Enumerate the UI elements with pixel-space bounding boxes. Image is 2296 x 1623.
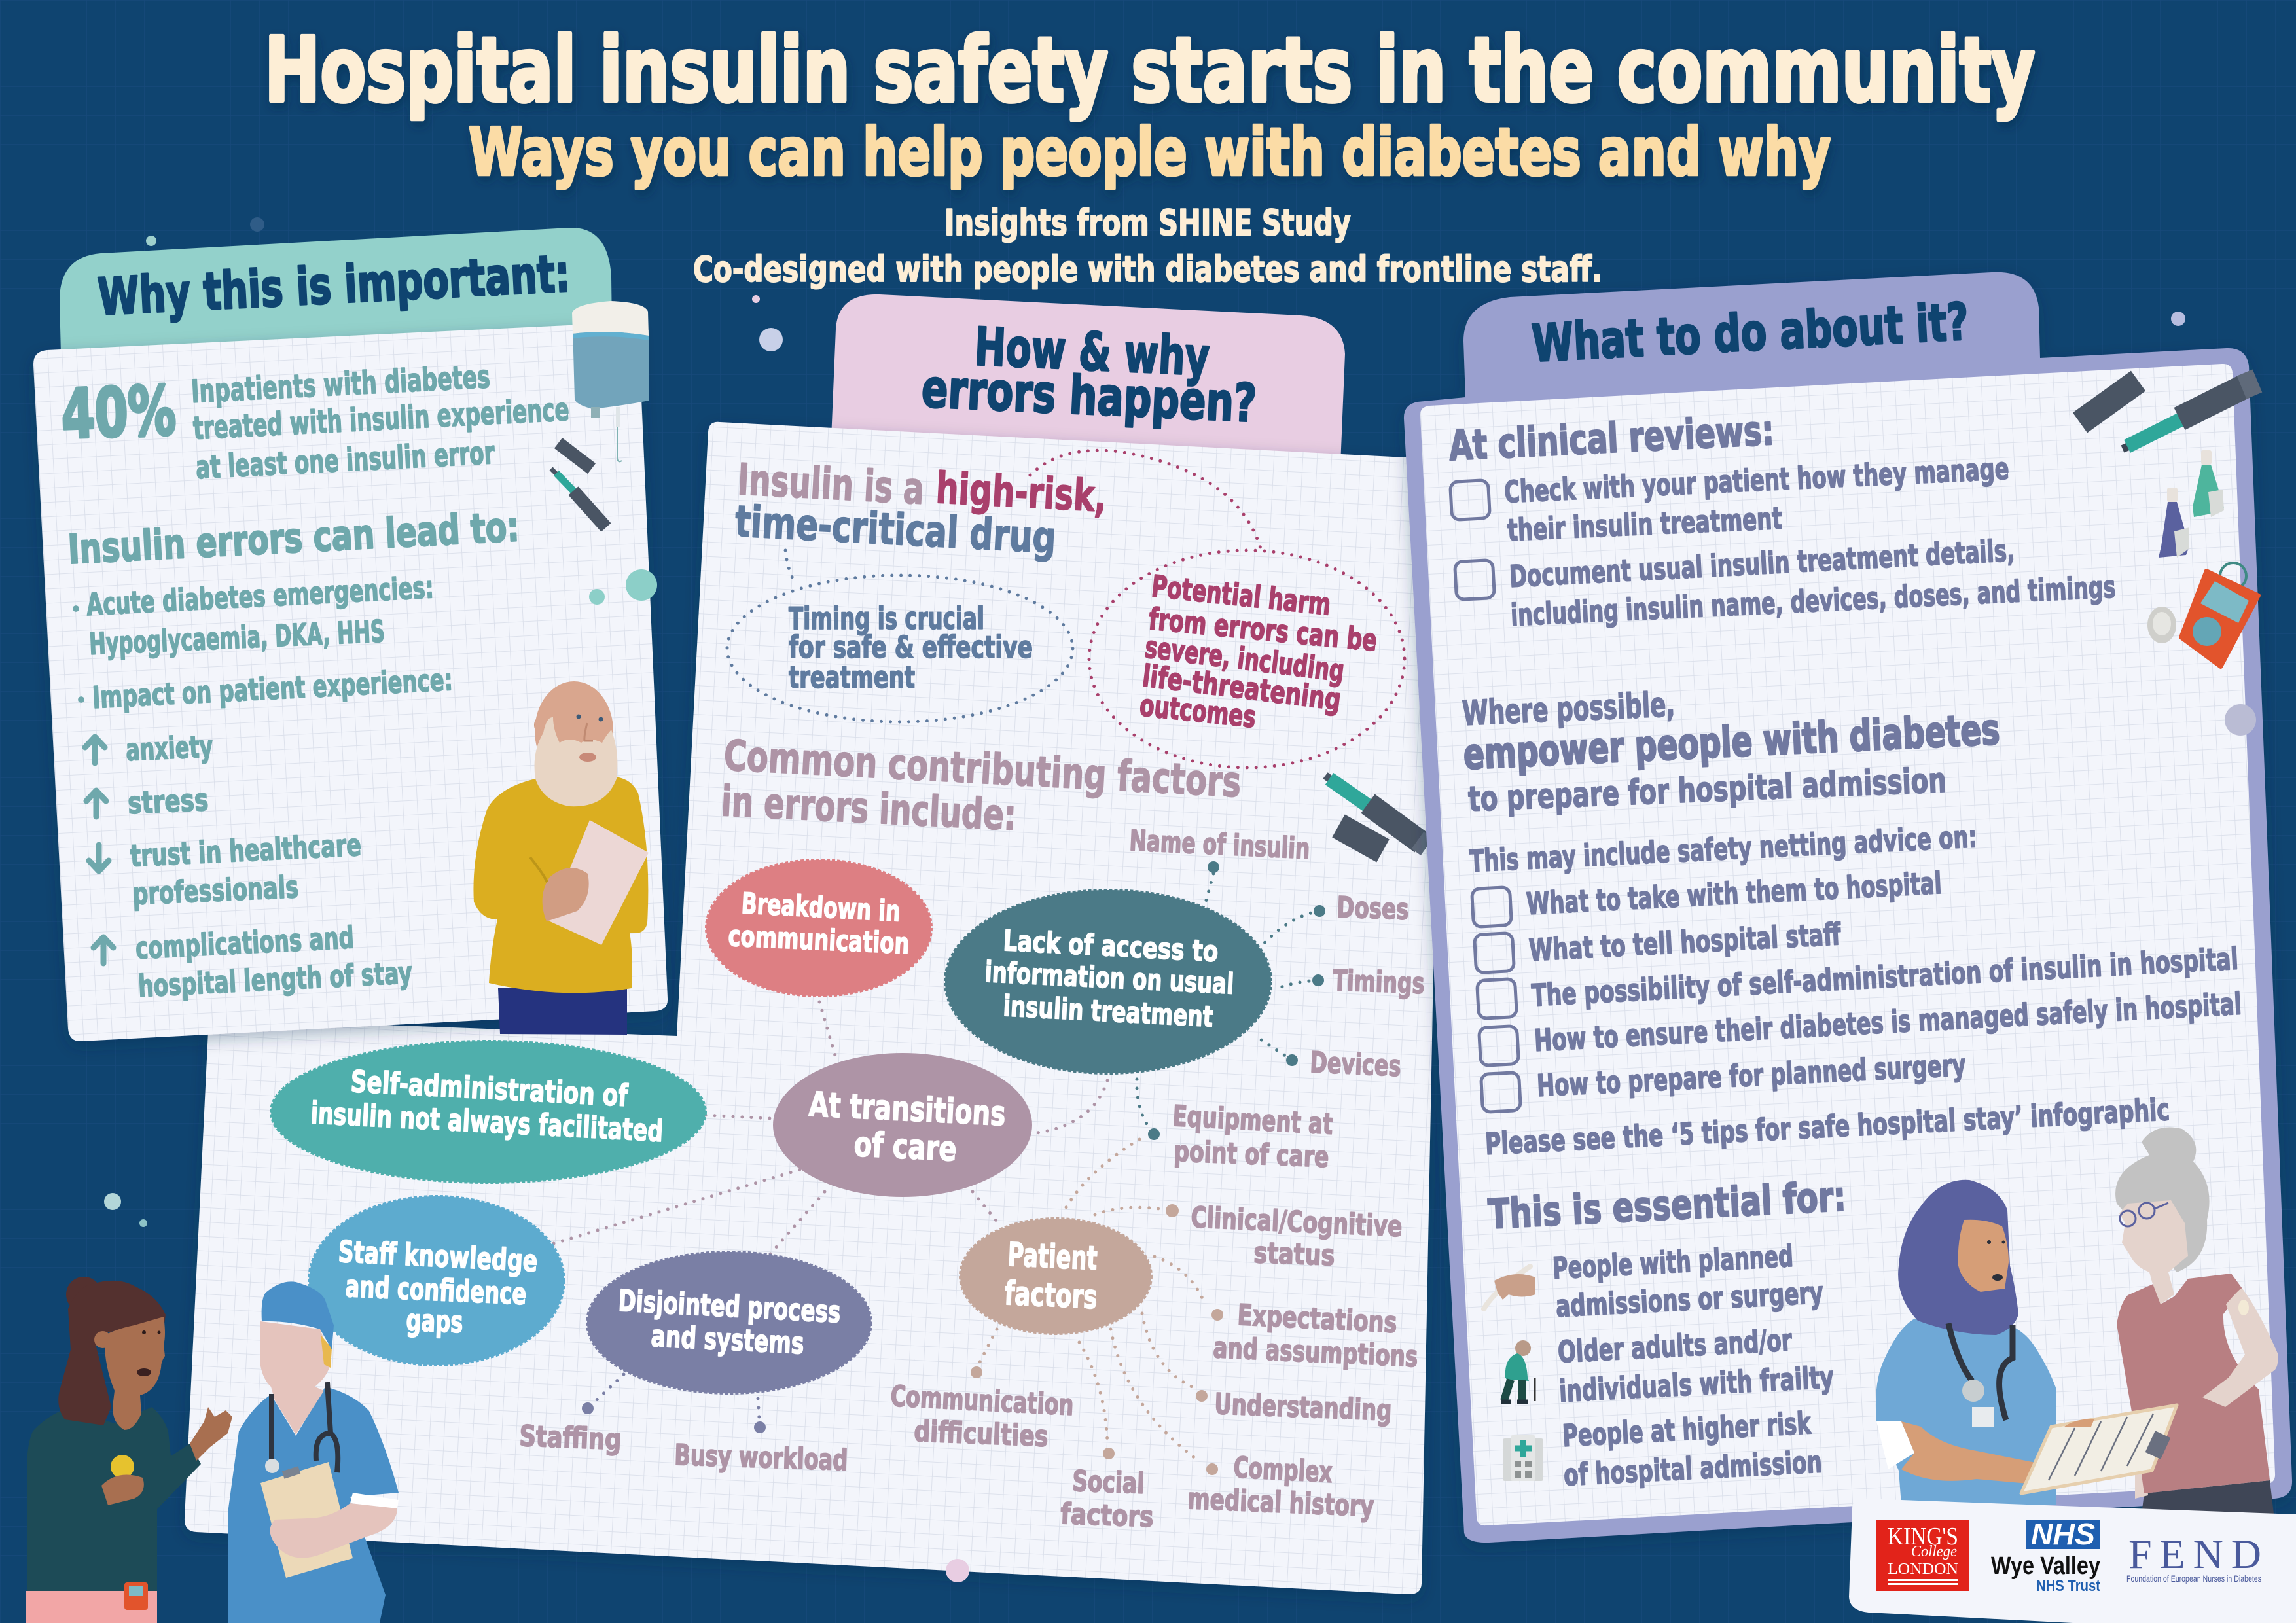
icon: insulin pump (2147, 563, 2259, 667)
checklist: safety netting advice: How to prepare for planned surgery (1536, 1047, 1967, 1103)
callout: timing is crucial: for safe & effective (789, 630, 1033, 665)
icon: insulin pen left (551, 443, 606, 527)
node dots (582, 861, 1325, 1475)
labels: contributing factor details: factors (1060, 1497, 1154, 1534)
panel: logos (1849, 1499, 2296, 1623)
node: lack of access: Lack of access to (1002, 924, 1219, 969)
logo: nhs wye valley: NHS (2031, 1517, 2095, 1551)
section: empower people: to prepare for hospital admission (1467, 761, 1947, 819)
section: empower people (1462, 685, 2001, 819)
labels: contributing factor details: Name of insulin (1128, 824, 1311, 866)
node: staff knowledge: and confidence (345, 1268, 528, 1311)
illustration: woman with diabetes (26, 1277, 232, 1623)
labels: contributing factor details: Clinical/Cognitive (1191, 1201, 1403, 1243)
list: consequences (73, 569, 454, 1004)
section: this is essential for: People at higher risk (1562, 1405, 1812, 1454)
node: lack of access (945, 890, 1271, 1073)
heading: what to do about it: What to do about it? (1530, 293, 1970, 374)
node: breakdown in communication: Breakdown in (740, 887, 901, 929)
heading: insulin high risk: high-risk, (935, 463, 1108, 522)
stat: 40 percent: 40% (60, 372, 177, 454)
subtitle: Ways you can help people with diabetes and why (469, 114, 1831, 190)
icon: hand with scalpel (1484, 1266, 1535, 1309)
callout: potential harm: outcomes (1138, 687, 1258, 735)
decorative dots (104, 217, 2185, 1227)
panel: what to do about it (1404, 272, 2292, 1543)
callout: potential harm: life-threatening (1141, 658, 1343, 717)
node: at transitions of care: At transitions (808, 1085, 1007, 1134)
callout: potential harm: from errors can be (1147, 601, 1379, 658)
heading: insulin high risk: time-critical drug (734, 496, 1058, 563)
logo: nhs wye valley: Wye Valley (1991, 1552, 2100, 1580)
list: consequences: professionals (132, 869, 299, 912)
heading: insulin high risk: Insulin is a (736, 454, 925, 514)
node: self administration: Self-administration of (350, 1063, 629, 1113)
callout: potential harm (1030, 450, 1405, 768)
heading: common contributing factors: in errors include: (720, 777, 1017, 840)
list: consequences: Acute diabetes emergencies: (86, 569, 435, 622)
node: staff knowledge: gaps (406, 1302, 463, 1340)
heading: insulin errors can lead to: Insulin errors can lead to: (67, 503, 520, 573)
labels: contributing factor details: Devices (1310, 1046, 1402, 1083)
heading: how and why errors happen (920, 316, 1258, 434)
paper: middle sheet (185, 422, 1443, 1594)
heading: how and why errors happen: errors happen? (920, 358, 1258, 434)
text: inpatients: treated with insulin experience (192, 391, 570, 447)
logo: fend: FEND (2128, 1531, 2261, 1577)
heading: common contributing factors: Common contributing factors (723, 732, 1242, 807)
node: at transitions of care: of care (853, 1125, 958, 1169)
illustration: older woman (2115, 1127, 2278, 1525)
pink dot (946, 1559, 969, 1582)
study note (693, 202, 1602, 290)
panel: how and why errors happen (185, 294, 1443, 1594)
node: staff knowledge: Staff knowledge (337, 1234, 539, 1279)
logo: kings college london (1876, 1520, 1969, 1591)
illustration: nurse in hijab (1876, 1180, 2056, 1505)
callout: potential harm: severe, including (1143, 629, 1346, 688)
node: disjointed process: Disjointed process (617, 1283, 842, 1330)
checklist: safety netting advice (1469, 819, 2242, 1162)
icon: teal dots (589, 569, 657, 605)
tab: why this is important (60, 228, 612, 353)
section: at clinical reviews: their insulin treatment (1507, 501, 1783, 548)
node: patient factors: Patient (1007, 1236, 1098, 1277)
section: this is essential for: admissions or surgery (1555, 1275, 1824, 1324)
section: at clinical reviews (1448, 406, 2116, 633)
labels: contributing factor details (519, 824, 1425, 1534)
node: lack of access: information on usual (984, 955, 1234, 1001)
connectors (554, 874, 1319, 1461)
icons: arrows (85, 737, 113, 963)
node: at transitions of care (773, 1053, 1032, 1197)
logo: nhs wye valley (1991, 1517, 2100, 1595)
icon: insulin pen middle (1325, 776, 1427, 851)
labels: contributing factor details: Communication (889, 1380, 1075, 1422)
node: breakdown in communication: communication (728, 919, 910, 961)
section: at clinical reviews: At clinical reviews: (1448, 406, 1775, 470)
illustration: male nurse (228, 1281, 399, 1623)
labels: contributing factor details: Staffing (519, 1419, 622, 1457)
node: patient factors (960, 1219, 1151, 1334)
section: this is essential for: of hospital admission (1563, 1444, 1823, 1493)
section: this is essential for: This is essential for: (1487, 1172, 1847, 1238)
list: consequences: trust in healthcare (130, 827, 362, 874)
tab: how and why (831, 294, 1345, 465)
text: inpatients: at least one insulin error (195, 435, 495, 486)
labels: contributing factor details: medical history (1187, 1482, 1374, 1524)
section: empower people: Where possible, (1462, 685, 1676, 734)
heading: why this is important: Why this is important: (96, 245, 571, 327)
labels: contributing factor details: Social (1072, 1465, 1145, 1501)
node: breakdown in communication (706, 860, 931, 996)
text: inpatients: Inpatients with diabetes (190, 359, 491, 410)
study note: Insights from SHINE Study (944, 202, 1351, 243)
text: inpatients (190, 359, 570, 486)
illustration: clipboard (2021, 1405, 2177, 1493)
logo: kings college london: KING'S (1888, 1523, 1958, 1550)
section: this is essential for: individuals with frailty (1558, 1359, 1835, 1409)
checklist: safety netting advice: What to take with them to hospital (1526, 865, 1943, 921)
heading: insulin high risk (734, 454, 1108, 563)
illustration: older man (473, 681, 649, 1035)
node: patient factors: factors (1003, 1274, 1098, 1316)
list: consequences: stress (127, 782, 209, 821)
callout: potential harm: Potential harm (1150, 568, 1333, 622)
node: disjointed process: and systems (650, 1318, 805, 1361)
section: this is essential for: People with planned (1552, 1238, 1794, 1286)
logo: nhs wye valley: NHS Trust (2036, 1577, 2100, 1595)
node: lack of access: insulin treatment (1002, 990, 1214, 1034)
heading: common contributing factors (720, 732, 1242, 840)
section: this is essential for (1487, 1172, 1847, 1493)
logo: kings college london: College (1911, 1543, 1957, 1560)
paper: right sheet (1420, 364, 2275, 1525)
checklist: safety netting advice: This may include safety netting advice on: (1469, 819, 1978, 879)
section: empower people: empower people with diabetes (1462, 705, 2001, 779)
frame: purple sheet with tab (1404, 272, 2292, 1543)
icon: insulin pen right (2080, 381, 2257, 449)
section: at clinical reviews: Check with your patient how they manage (1503, 451, 2010, 510)
logo: kings college london: LONDON (1888, 1561, 1958, 1578)
list: consequences: Impact on patient experience: (92, 662, 454, 715)
paper: left sheet (33, 322, 668, 1041)
heading: how and why errors happen: How & why (973, 316, 1211, 387)
labels: contributing factor details: and assumptions (1213, 1331, 1418, 1374)
labels: contributing factor details: Equipment at (1172, 1099, 1334, 1141)
icon: older adult with cane (1501, 1340, 1535, 1402)
callout: timing is crucial (727, 550, 1073, 722)
list: consequences: anxiety (125, 728, 213, 768)
node: self administration: insulin not always facilitated (310, 1095, 664, 1149)
labels: contributing factor details: Complex (1232, 1451, 1333, 1489)
node: disjointed process (587, 1252, 871, 1393)
labels: contributing factor details: Busy workload (674, 1438, 848, 1477)
icon: hospital (1503, 1435, 1543, 1481)
dot: lilac (2225, 704, 2256, 736)
icon: iv bag (572, 301, 649, 461)
list: consequences: hospital length of stay (137, 955, 413, 1004)
callout: timing is crucial: Timing is crucial (789, 601, 984, 636)
study note: Co-designed with people with diabetes and frontline staff. (693, 249, 1602, 290)
checklist: safety netting advice: What to tell hospital staff (1528, 916, 1842, 968)
labels: contributing factor details: point of care (1174, 1135, 1329, 1174)
section: at clinical reviews: Document usual insulin treatment details, (1509, 533, 2016, 594)
callout: timing is crucial: treatment (789, 660, 915, 695)
list: consequences: Hypoglycaemia, DKA, HHS (88, 613, 386, 662)
icon: insulin vials (2159, 450, 2224, 558)
node: self administration (271, 1041, 706, 1183)
labels: contributing factor details: Doses (1336, 891, 1409, 927)
labels: contributing factor details: status (1253, 1236, 1335, 1272)
section: this is essential for: Older adults and/or (1557, 1322, 1793, 1370)
labels: contributing factor details: difficulties (914, 1415, 1049, 1454)
list: consequences: complications and (135, 919, 355, 966)
labels: contributing factor details: Expectations (1236, 1298, 1398, 1340)
node: staff knowledge (309, 1196, 564, 1365)
labels: contributing factor details: Timings (1333, 964, 1425, 1001)
labels: contributing factor details: Understanding (1214, 1387, 1392, 1427)
